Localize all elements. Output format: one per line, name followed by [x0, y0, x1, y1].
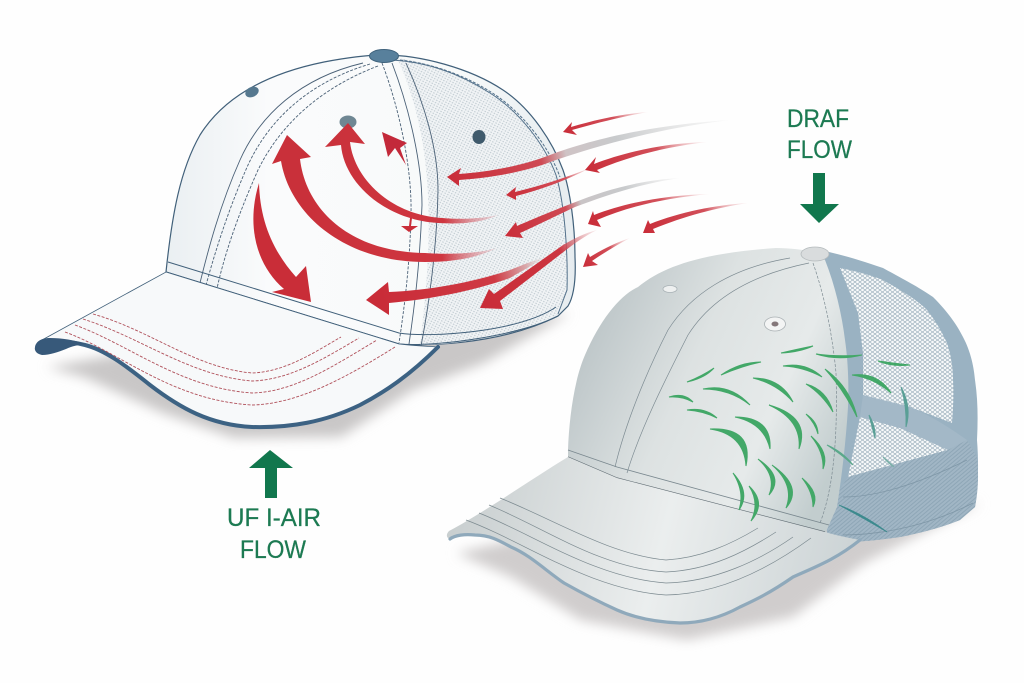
arrow: entering top with gray tail: [447, 120, 730, 186]
headband lines: [568, 450, 829, 532]
visor: [42, 272, 438, 427]
mesh back base: [813, 248, 978, 542]
mesh opening lower: [848, 417, 948, 477]
green airflow strokes: [669, 346, 910, 532]
eyelet middle: [340, 116, 356, 128]
arrow: outer low: [583, 238, 630, 267]
label: draft flow: [787, 105, 852, 223]
eyelet left: [244, 85, 260, 99]
shadow: left cap: [47, 313, 570, 438]
rear strap: [860, 395, 967, 450]
arrow: small star head: [382, 132, 407, 165]
cap: left white cap: [35, 50, 575, 427]
text: FLOW: FLOW: [787, 136, 852, 164]
eyelet small: [663, 286, 677, 292]
text: FLOW: FLOW: [240, 536, 306, 564]
visor tip: [35, 338, 86, 355]
arrow: curved lower-left: [253, 183, 311, 302]
center seams: [382, 63, 438, 346]
rear textured panel: [397, 58, 567, 345]
top button: [370, 50, 398, 62]
arrow: outer mid: [588, 194, 710, 227]
visor edge: [450, 535, 860, 623]
cap: right gray mesh cap: [447, 247, 978, 623]
top button: [801, 247, 829, 261]
arrow: entering second: [506, 168, 590, 200]
rear inner seams: [392, 60, 567, 314]
visor edge: [44, 342, 438, 427]
arrow: outer right: [643, 203, 748, 233]
crown seams: [615, 258, 836, 523]
icon: down arrow: [800, 173, 839, 223]
eyelet large: [764, 317, 786, 331]
icon: up arrow: [249, 450, 293, 498]
crown: [166, 55, 575, 345]
rear band: [827, 440, 978, 542]
arrow: tiny down: [401, 218, 418, 232]
arrow: curved large: [272, 135, 497, 262]
eyelet right: [472, 130, 486, 144]
crown front: [568, 248, 848, 534]
arrow: outer top small: [563, 112, 648, 135]
text: UF I-AIR: UF I-AIR: [227, 504, 321, 532]
visor red stitching: [65, 314, 395, 405]
arrow: outside second: [585, 142, 707, 173]
arrow: long diagonal: [480, 230, 597, 309]
arrows: red airflow inside cap: [253, 112, 748, 315]
label: up-air flow: [227, 450, 321, 564]
mesh opening upper: [840, 268, 953, 423]
visor stitching: [466, 498, 811, 595]
arrow: entering third with gray tail: [505, 178, 680, 238]
arrow: curved medium: [325, 123, 498, 223]
rear band lines: [843, 460, 973, 535]
arrow: low horizontal: [366, 257, 545, 315]
headband lines: [166, 262, 558, 344]
left curved seams: [199, 63, 378, 293]
shadow: right cap: [456, 503, 981, 640]
text: DRAF: DRAF: [787, 105, 849, 133]
visor: [447, 457, 860, 623]
